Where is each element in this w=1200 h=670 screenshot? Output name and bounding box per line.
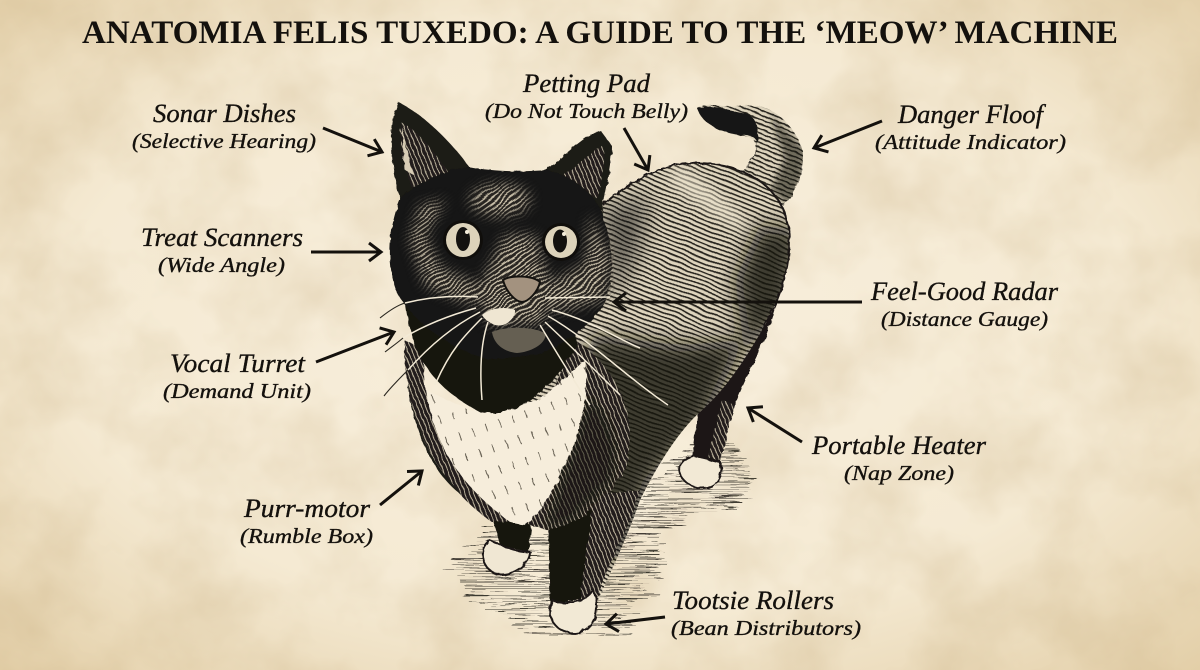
body [528,163,790,600]
label: Purr-motor: Purr-motor [243,494,371,523]
label: Sonar Dishes [132,99,316,153]
front left leg [492,515,532,552]
label: Feel-Good Radar [870,277,1059,331]
rear leg [692,310,775,462]
whiskers [403,296,668,405]
label: Treat Scanners: Treat Scanners [141,223,303,252]
label: Tootsie Rollers: (Bean Distributors) [671,616,861,640]
arrow: Danger Floof [814,121,882,148]
right eye [542,223,580,261]
arrow: Treat Scanners [311,250,381,254]
arrow: Vocal Turret [316,332,394,362]
body outline [603,163,789,330]
label: Portable Heater [811,431,987,485]
left eye [443,220,483,260]
label: Tootsie Rollers: Tootsie Rollers [672,586,834,615]
left ear [391,102,470,215]
label: Vocal Turret: Vocal Turret [170,349,306,378]
label: Sonar Dishes: Sonar Dishes [153,99,296,128]
chin [492,328,546,353]
label: Feel-Good Radar: Feel-Good Radar [870,277,1059,306]
label: Purr-motor: (Rumble Box) [240,524,373,548]
label: Danger Floof: Danger Floof [897,100,1047,129]
tail [697,104,804,206]
chest side fur [510,340,630,530]
label: Danger Floof [875,100,1066,154]
body dark shading [540,195,800,560]
label: Vocal Turret [163,349,311,403]
label: Purr-motor [240,494,373,548]
label: Petting Pad [485,69,688,123]
label: Vocal Turret: (Demand Unit) [163,379,311,403]
right ear [545,130,612,210]
front right leg [548,490,640,605]
label: Danger Floof: (Attitude Indicator) [875,130,1066,154]
ground shadow hatching [455,445,752,632]
arrow: Sonar Dishes [323,128,382,152]
cat illustration [380,95,810,633]
label: Petting Pad: Petting Pad [522,69,651,98]
arrow: Petting Pad [624,128,648,170]
front left paw [482,540,530,574]
label: Treat Scanners: (Wide Angle) [158,253,285,277]
arrow: Tootsie Rollers [606,617,665,624]
nose [503,276,540,302]
label: Portable Heater: (Nap Zone) [844,461,954,485]
label: Petting Pad: (Do Not Touch Belly) [485,99,688,123]
head [390,167,611,360]
white muzzle patch [482,308,515,326]
arrow: Feel-Good Radar [614,300,862,304]
arrow: Purr-motor [380,471,422,505]
rear paw [679,456,721,488]
label: Feel-Good Radar: (Distance Gauge) [881,307,1048,331]
right ear inner [560,145,604,198]
whisker tips over paper [380,303,408,396]
label: Sonar Dishes: (Selective Hearing) [132,129,316,153]
front right paw [550,590,597,633]
white chest [414,360,586,525]
body light patch [668,165,755,235]
black neck bib [405,280,578,413]
face fur highlights [402,175,616,333]
label: Tootsie Rollers [671,586,861,640]
title: ANATOMIA FELIS TUXEDO: A GUIDE TO THE ‘MEOW’ MACHINE [82,15,1118,51]
left ear inner [400,122,448,195]
label: Portable Heater: Portable Heater [811,431,987,460]
chest outline shading [404,340,510,522]
arrow: Portable Heater [748,408,802,442]
label: Treat Scanners [141,223,303,277]
